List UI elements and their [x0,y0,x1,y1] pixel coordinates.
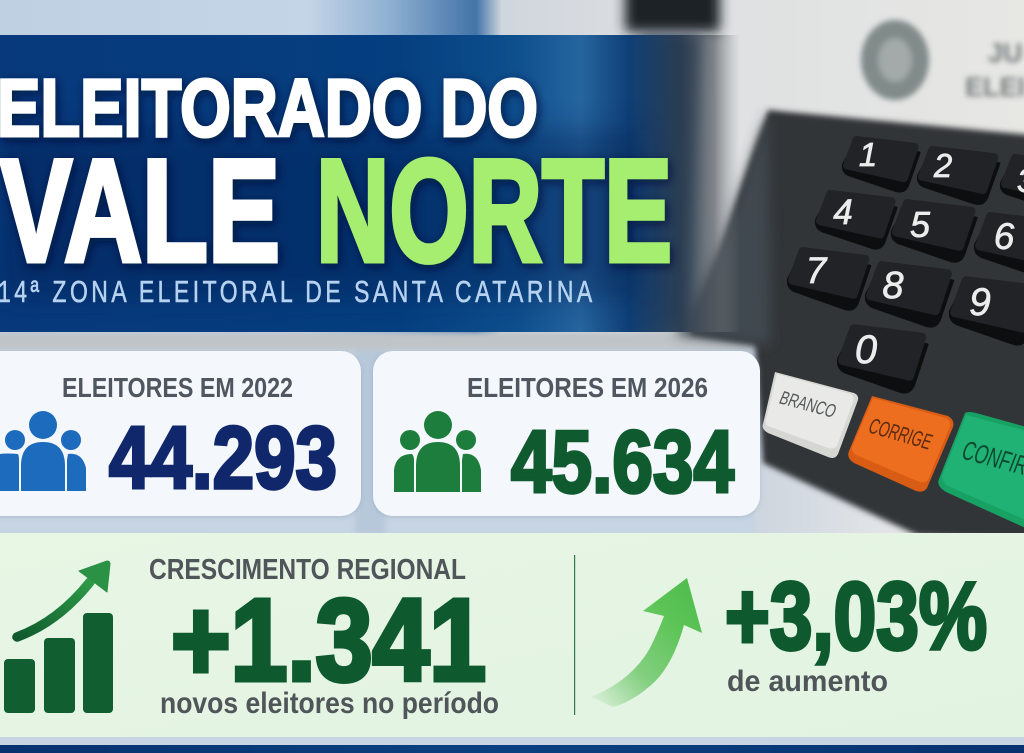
subtitle: 14ª ZONA ELEITORAL DE SANTA CATARINA [0,274,593,309]
emblem: blurred seal: JU [988,38,1023,68]
card label: ELEITORES EM 2022 [62,372,293,403]
strip below banner [0,332,780,350]
button: branco [763,372,858,458]
keypad: 1 [859,136,877,173]
title line 2: NORTE [316,129,672,292]
emblem: blurred seal: ELEI [965,72,1024,102]
value 2022: 44.293 [109,408,337,507]
card label: ELEITORES EM 2026 [467,372,708,403]
icon: people green [394,411,481,492]
title line 2: VALE [0,129,280,292]
keypad [788,136,1024,392]
value: novos eleitores: +1.341 [171,575,486,705]
keypad: 2 [933,147,952,184]
keypad: 5 [910,204,931,245]
card: eleitores 2026 [373,351,760,516]
icon: people blue [0,411,86,491]
button: branco: BRANCO [776,388,839,422]
title line 1: ELEITORADO DO [0,63,538,154]
value 2026: 45.634 [511,412,734,511]
keypad: 0 [855,328,877,372]
caption: novos eleitores no período [160,687,499,720]
footer bar [0,745,1024,753]
keypad: 9 [969,281,991,324]
panel: crescimento [0,533,1024,737]
icon: growth arrow [591,578,702,707]
keypad: 6 [994,216,1015,257]
caption: de aumento [727,665,888,698]
keypad: 8 [882,265,904,307]
icon: growth chart [4,561,113,713]
keypad: 7 [806,250,828,291]
banner [0,35,740,332]
keypad: 4 [833,193,853,232]
button: corrige [848,396,953,492]
machine body [690,110,1024,540]
floor under machine [755,455,925,535]
button: confirma [938,412,1024,530]
heading: CRESCIMENTO REGIONAL [149,554,466,586]
emblem: blurred seal [861,20,1024,102]
slate haze beside machine [640,36,700,326]
button: corrige: CORRIGE [865,413,936,454]
title line 2 [0,129,672,292]
card: eleitores 2022 [0,351,361,516]
divider [574,555,575,715]
